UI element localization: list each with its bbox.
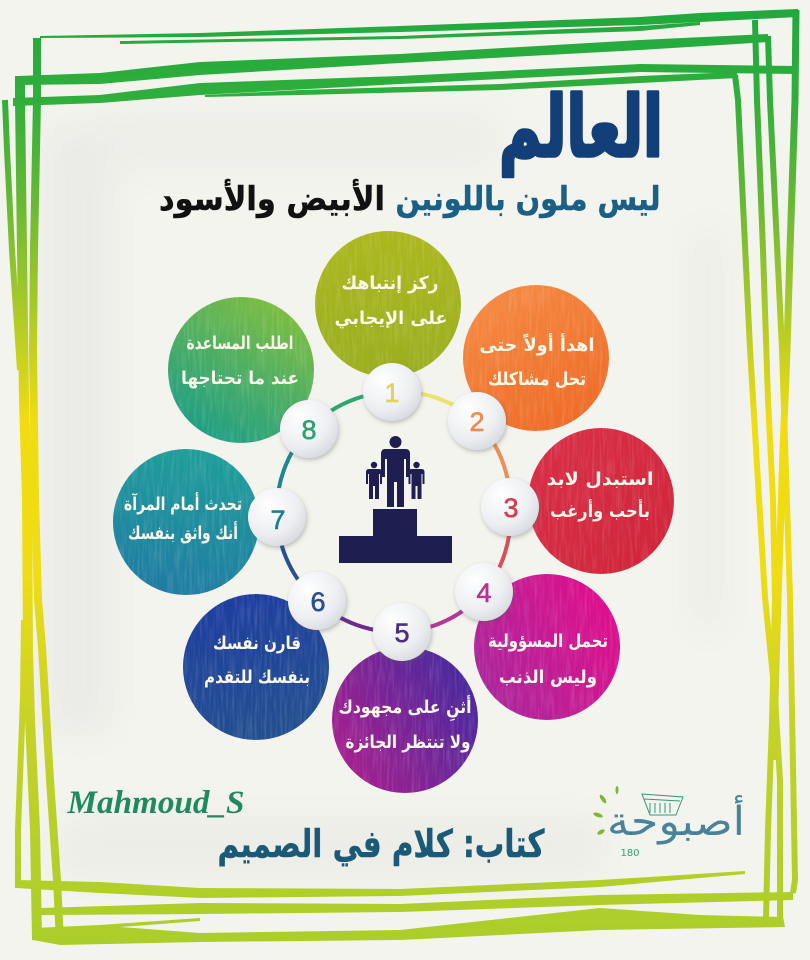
text 2: [480, 333, 594, 390]
text 5: [338, 695, 472, 753]
number 1: [363, 363, 421, 421]
number 4: [455, 563, 513, 621]
text 4: وليس الذنب: [499, 667, 597, 688]
number 8: 8: [301, 415, 317, 445]
text 4: تحمل المسؤولية: [488, 631, 608, 652]
text 4: [488, 631, 608, 688]
icon: right figure: [408, 462, 424, 499]
panel: step 5: [332, 647, 478, 793]
text 3: [546, 469, 654, 522]
text 1: [334, 273, 448, 329]
circle 7: [113, 449, 259, 595]
author name: Mahmoud_S: [66, 785, 244, 821]
logo sun rays: [593, 786, 618, 836]
circle wear texture: [110, 230, 680, 795]
frame top strokes: [13, 9, 798, 106]
subtitle: black part: الأبيض والأسود: [159, 178, 385, 219]
number 8: [280, 400, 338, 458]
text 8: عند ما تحتاجها: [181, 368, 299, 389]
text 8: [181, 333, 299, 389]
logo arch icon: [642, 794, 683, 815]
panel: step 8: [168, 297, 314, 443]
text 2: تحل مشاكلك: [488, 369, 586, 390]
panel: step 7: [113, 449, 259, 595]
text 2: اهدأ أولاً حتى: [480, 333, 594, 356]
circle 3: [528, 428, 674, 574]
book credit: كتاب: كلام في الصميم: [218, 822, 545, 867]
number discs: [248, 363, 539, 661]
paper texture: [48, 110, 725, 875]
number 6: 6: [310, 587, 326, 617]
logo 180: 180: [620, 848, 640, 859]
text 1: ركز إنتباهك: [342, 273, 438, 294]
text 7: [124, 492, 242, 544]
text 7: أنك واثق بنفسك: [128, 521, 238, 544]
text 3: بأحب وأرغب: [550, 499, 650, 522]
panel: step 4: [474, 574, 620, 720]
number 7: 7: [270, 505, 286, 535]
text 6: بنفسك للتقدم: [204, 667, 310, 688]
frame bottom strokes: [16, 871, 793, 945]
subtitle: [159, 178, 660, 219]
circle 1: [315, 231, 461, 377]
text 6: قارن نفسك: [213, 633, 301, 654]
number 6: [288, 572, 346, 630]
panel: step 1: [315, 231, 461, 377]
text 5: ولا تنتظر الجائزة: [346, 732, 470, 753]
logo: [593, 786, 745, 859]
icon: large figure: [381, 436, 410, 507]
number 3: 3: [503, 493, 519, 523]
number 7: [248, 488, 306, 546]
connecting ring: [277, 392, 510, 632]
text 3: استبدل لابد: [546, 469, 654, 490]
panel: step 2: [463, 285, 609, 431]
number 2: [448, 392, 506, 450]
panel: step 6: [183, 594, 329, 740]
panel: step 3: [528, 428, 674, 574]
icon: leader with two people on podium: [339, 436, 452, 563]
number 4: 4: [476, 578, 492, 608]
logo wordmark: أصبوحة: [607, 795, 745, 845]
circle 8: [168, 297, 314, 443]
subtitle: coloured part: ليس ملون باللونين: [396, 179, 660, 219]
icon: left figure: [366, 462, 382, 499]
number 5: [373, 603, 431, 661]
text 6: [204, 633, 310, 688]
title: العالم: [499, 78, 663, 177]
podium: [339, 509, 452, 563]
circle 5: [332, 647, 478, 793]
number 5: 5: [394, 618, 410, 648]
circle 2: [463, 285, 609, 431]
circle 6: [183, 594, 329, 740]
text 8: اطلب المساعدة: [186, 333, 294, 354]
number 1: 1: [384, 378, 400, 408]
circle 4: [474, 574, 620, 720]
number 3: [481, 478, 539, 536]
text 5: أثنِ على مجهودك: [338, 695, 472, 721]
number 2: 2: [469, 407, 485, 437]
text 7: تحدث أمام المرآة: [124, 492, 242, 515]
text 1: على الإيجابي: [334, 308, 448, 329]
